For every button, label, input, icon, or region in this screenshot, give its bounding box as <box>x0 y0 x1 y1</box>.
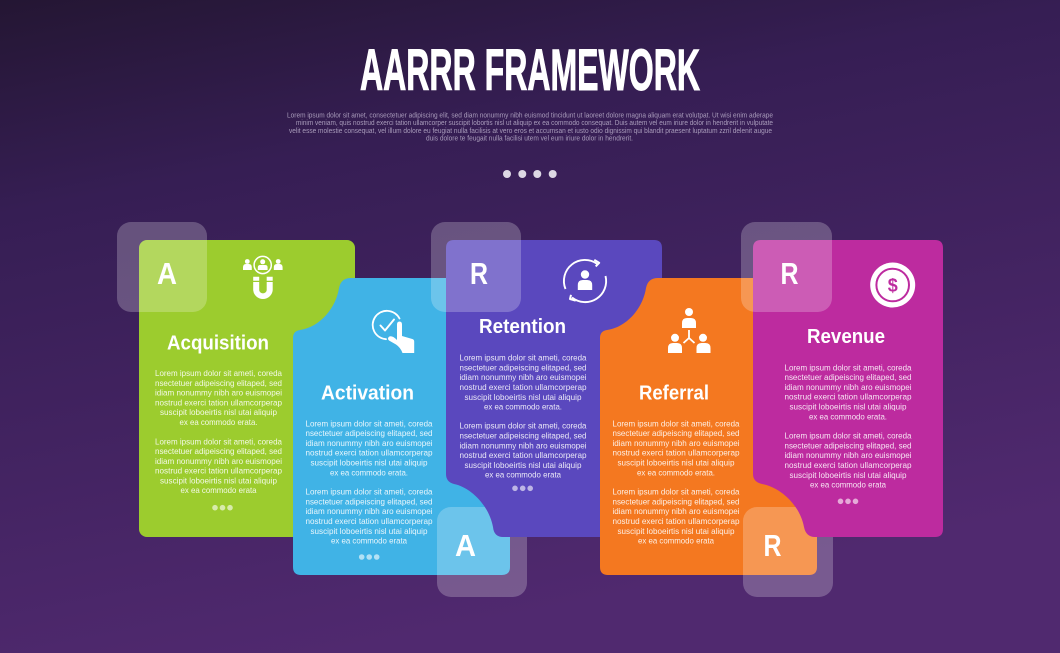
body text: acquisition: nsectetuer adipeiscing elitaped, sed <box>155 378 282 388</box>
body text: retention: Lorem ipsum dolor sit ameti, coreda <box>460 353 587 363</box>
body text: acquisition: nostrud exerci tation ullamcorperap <box>155 397 282 407</box>
body text: revenue: nostrud exerci tation ullamcorperap <box>784 460 912 470</box>
body text: referral <box>612 418 740 546</box>
heading: activation: Activation <box>321 382 414 404</box>
body text: revenue: nsectetuer adipeiscing elitaped, sed <box>784 372 912 382</box>
body text: activation: idiam nonummy nibh aro euismopei <box>306 506 433 516</box>
body text: acquisition: suscipit loboeirtis nisl utai aliquip <box>160 407 277 417</box>
body text: acquisition <box>155 368 282 495</box>
more dots: activation <box>359 554 380 560</box>
body text: referral: idiam nonummy nibh aro euismopei <box>612 438 740 448</box>
body text: revenue: Lorem ipsum dolor sit ameti, coreda <box>784 362 912 372</box>
body text: activation: nostrud exerci tation ullamcorperap <box>306 516 433 526</box>
body text: activation: Lorem ipsum dolor sit ameti, coreda <box>306 487 433 497</box>
body text: activation: nostrud exerci tation ullamcorperap <box>306 448 433 458</box>
panel: acquisition <box>117 222 355 537</box>
heading: revenue: Revenue <box>807 326 885 348</box>
body text: retention: nostrud exerci tation ullamcorperap <box>460 382 587 392</box>
body text: referral: suscipit loboeirtis nisl utai aliquip <box>618 457 735 467</box>
intro text block: Lorem ipsum dolor sit amet, consectetuer adipiscing elit, sed diam nonummy nibh euismod tincidunt ut laoreet dolore magna aliquam erat volutpat. Ut wisi enim aderape <box>287 112 773 120</box>
icon: person in cycle arrows <box>564 260 606 302</box>
body text: referral: nsectetuer adipeiscing elitaped, sed <box>612 428 740 438</box>
panel: activation <box>293 278 527 597</box>
body text: referral: suscipit loboeirtis nisl utai aliquip <box>618 526 735 536</box>
icon: dollar coin: $ <box>888 276 898 296</box>
body text: acquisition: nsectetuer adipeiscing elitaped, sed <box>155 446 282 456</box>
body text: retention: ex ea commodo erata <box>485 470 561 480</box>
more dots: retention <box>512 486 533 491</box>
badge letter: A: A <box>157 256 177 291</box>
more dots: acquisition <box>212 505 233 511</box>
badge letter: R: R <box>780 256 798 291</box>
body text: retention: idiam nonummy nibh aro euismopei <box>460 440 587 450</box>
body text: revenue: idiam nonummy nibh aro euismopei <box>784 382 912 392</box>
body text: revenue <box>784 362 912 490</box>
body text: activation: idiam nonummy nibh aro euismopei <box>306 438 433 448</box>
body text: referral: Lorem ipsum dolor sit ameti, coreda <box>612 487 740 497</box>
badge square: A <box>437 507 527 597</box>
body text: acquisition: idiam nonummy nibh aro euismopei <box>155 388 282 398</box>
heading: referral: Referral <box>639 382 709 404</box>
body text: revenue: idiam nonummy nibh aro euismopei <box>784 450 912 460</box>
body text: referral: ex ea commodo erata <box>638 536 714 546</box>
body text: retention: idiam nonummy nibh aro euismopei <box>460 372 587 382</box>
title: AARRR FRAMEWORK <box>360 38 700 103</box>
icon: check and pointing hand <box>373 311 414 353</box>
body text: retention: Lorem ipsum dolor sit ameti, coreda <box>460 421 587 431</box>
more dots: revenue <box>838 498 858 504</box>
body text: acquisition: idiam nonummy nibh aro euismopei <box>155 456 282 466</box>
body text: activation: ex ea commodo erata. <box>330 467 408 477</box>
body text: referral: nostrud exerci tation ullamcorperap <box>612 448 740 458</box>
body text: activation: Lorem ipsum dolor sit ameti, coreda <box>306 418 433 428</box>
body text: acquisition: nostrud exerci tation ullamcorperap <box>155 466 282 476</box>
body text: revenue: nostrud exerci tation ullamcorperap <box>784 392 912 402</box>
body text: referral: Lorem ipsum dolor sit ameti, coreda <box>612 418 740 428</box>
icon: magnet attracting people <box>243 256 283 299</box>
body text: activation: ex ea commodo erata <box>331 536 407 546</box>
body text: revenue: suscipit loboeirtis nisl utai aliquip <box>790 470 907 480</box>
body text: retention: nsectetuer adipeiscing elitaped, sed <box>460 430 587 440</box>
body text: acquisition: ex ea commodo erata <box>180 485 257 495</box>
body text: activation: nsectetuer adipeiscing elitaped, sed <box>306 496 433 506</box>
badge square: R <box>743 507 833 597</box>
badge letter: R: R <box>470 256 488 291</box>
body text: retention <box>460 353 587 480</box>
body text: retention: nsectetuer adipeiscing elitaped, sed <box>460 362 587 372</box>
badge letter: R (referral): R <box>764 528 782 563</box>
body text: retention: ex ea commodo erata. <box>484 402 562 412</box>
body text: revenue: Lorem ipsum dolor sit ameti, coreda <box>784 431 912 441</box>
body text: activation: suscipit loboeirtis nisl utai aliquip <box>310 526 428 536</box>
body text: revenue: nsectetuer adipeiscing elitaped, sed <box>784 440 912 450</box>
heading: retention: Retention <box>479 316 566 338</box>
icon: dollar coin <box>870 262 915 308</box>
body text: referral: nsectetuer adipeiscing elitaped, sed <box>612 496 740 506</box>
body text: revenue: ex ea commodo erata <box>810 480 886 490</box>
body text: retention: suscipit loboeirtis nisl utai aliquip <box>464 392 582 402</box>
intro text block: duis dolore te feugait nulla facilisi utem vel eum iriure dolor in hendrerit. <box>426 136 633 143</box>
body text: revenue: suscipit loboeirtis nisl utai aliquip <box>790 401 907 411</box>
intro text block: velit esse molestie consequat, vel illum dolore eu feugiat nulla facilisis at vero eros et accumsan et iusto odio dignissim qui blandit praesent luptatum zzril delenit augue <box>289 128 772 135</box>
pagination dots <box>503 170 557 178</box>
intro text block: minim veniam, quis nostrud exerci tation ullamcorper suscipit lobortis nisl ut aliquip ex ea commodo consequat. Duis autem vel eum iriure dolor in hendrerit in vulputate <box>296 120 773 127</box>
heading: acquisition: Acquisition <box>167 332 269 354</box>
body text: acquisition: Lorem ipsum dolor sit ameti, coreda <box>155 436 282 446</box>
badge square: R <box>431 222 521 312</box>
badge letter: A (activation): A <box>455 528 476 563</box>
body text: revenue: ex ea commodo erata. <box>809 411 887 421</box>
icon: referral hierarchy <box>668 308 710 353</box>
badge square: R <box>741 222 832 312</box>
panel: referral <box>600 278 833 597</box>
body text: acquisition: suscipit loboeirtis nisl utai aliquip <box>160 475 277 485</box>
panel: revenue <box>741 222 943 563</box>
body text: activation <box>306 418 433 546</box>
body text: activation: nsectetuer adipeiscing elitaped, sed <box>306 428 433 438</box>
body text: retention: suscipit loboeirtis nisl utai aliquip <box>464 460 582 470</box>
body text: activation: suscipit loboeirtis nisl utai aliquip <box>310 457 428 467</box>
badge square: A <box>117 222 207 312</box>
body text: retention: nostrud exerci tation ullamcorperap <box>460 450 587 460</box>
body text: acquisition: Lorem ipsum dolor sit ameti, coreda <box>155 368 282 378</box>
body text: referral: ex ea commodo erata. <box>637 467 715 477</box>
body text: referral: nostrud exerci tation ullamcorperap <box>612 516 740 526</box>
body text: acquisition: ex ea commodo erata. <box>180 417 258 427</box>
body text: referral: idiam nonummy nibh aro euismopei <box>612 506 740 516</box>
intro text block <box>287 112 773 143</box>
panel: retention <box>431 222 662 563</box>
